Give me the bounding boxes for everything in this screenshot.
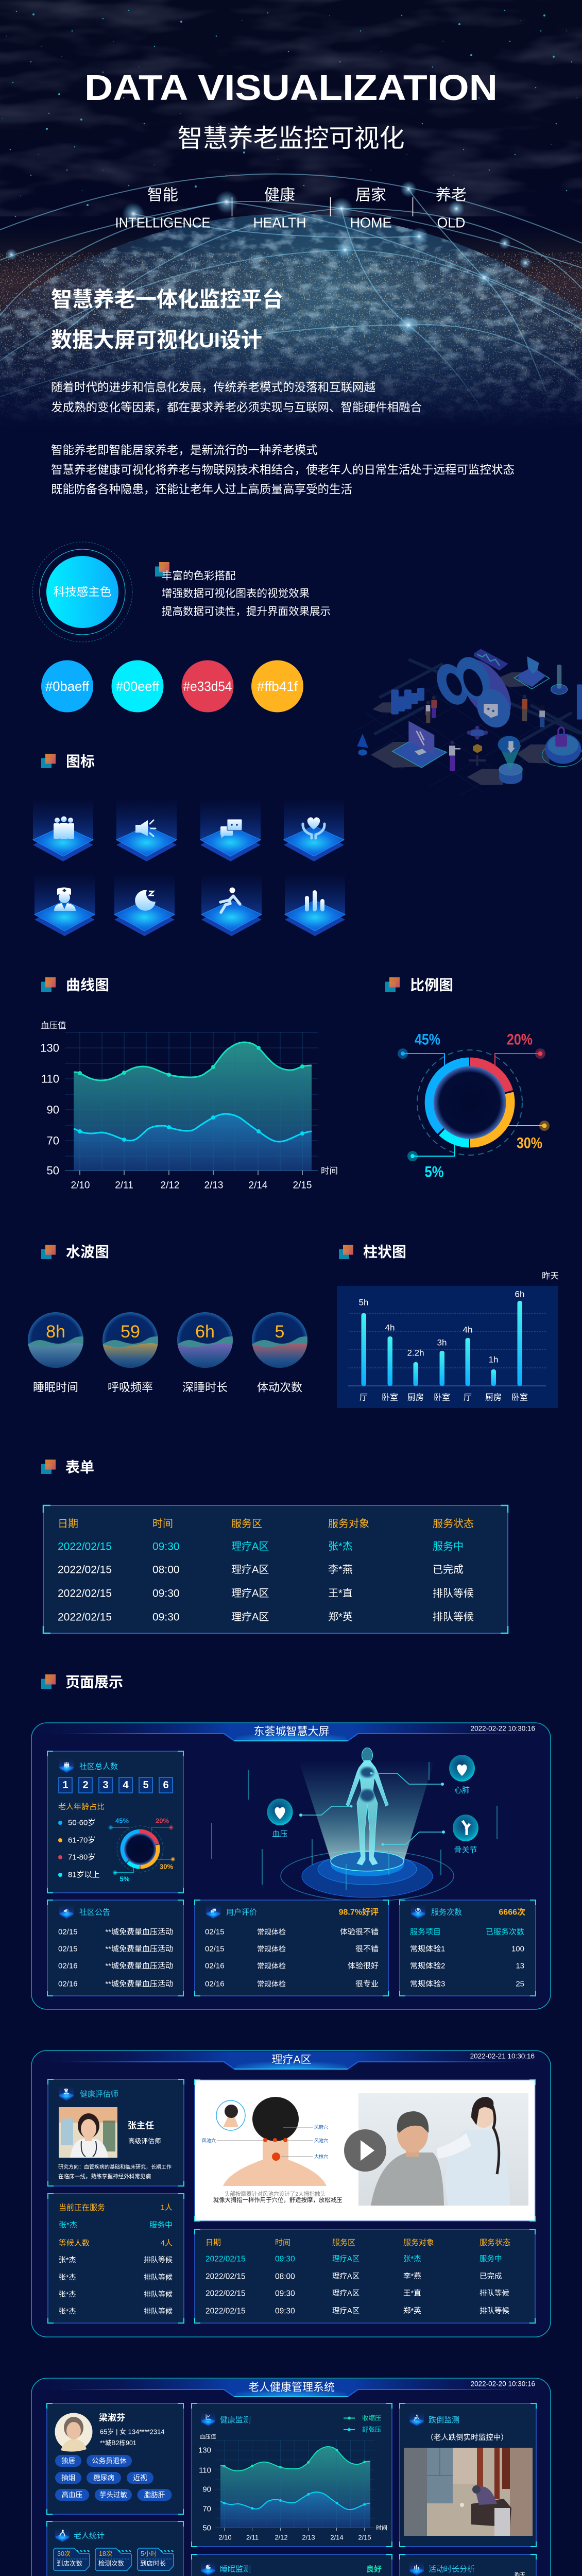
hero background: starry sky and city [0, 0, 582, 421]
panel: elder statistics: 检测次数 [98, 2560, 125, 2567]
heading: line chart: 曲线图 [66, 977, 109, 993]
heading: bar chart [339, 1244, 406, 1260]
panel: queue status: 服务中 [149, 2221, 173, 2230]
panel: elder statistics: 30次 [57, 2550, 71, 2557]
illustration: isometric smart network [354, 649, 582, 795]
panel: user reviews: 很不错 [355, 1944, 379, 1954]
panel: elder statistics: 到店时长 [140, 2560, 166, 2567]
panel: community population: 5 [143, 1780, 149, 1791]
keyword row: 健康 [264, 187, 295, 204]
panel: fall monitoring: （老人跌倒实时监控中） [426, 2433, 508, 2442]
table panel: 2022/02/15 [58, 1564, 112, 1575]
callout: bones and joints [453, 1815, 478, 1855]
panel: health monitoring: 110 [199, 2466, 211, 2475]
water charts: 深睡时长 [182, 1381, 228, 1394]
panel: user reviews: 用户评价 [226, 1908, 257, 1917]
table panel: 09:30 [152, 1588, 180, 1599]
heading: icons: 图标 [66, 753, 95, 770]
panel: service count: 常规体验3 [410, 1979, 445, 1989]
panel: community population: 81岁以上 [68, 1870, 100, 1879]
table panel: 09:30 [152, 1540, 180, 1553]
panel: service count: 常规体验1 [410, 1944, 445, 1954]
panel: community population: 45% [115, 1817, 129, 1825]
panel: service table: 理疗A区 [332, 2255, 360, 2263]
heading: proportion chart: 比例图 [410, 977, 453, 993]
panel: queue status: 张*杰 [59, 2290, 76, 2298]
panel: community notices: 02/16 [58, 1962, 78, 1970]
panel: elder statistics [47, 2521, 183, 2576]
heading: platform: 数据大屏可视化UI设计 [51, 328, 262, 352]
panel: community notices: 02/15 [58, 1944, 78, 1954]
icon: nurse [35, 873, 95, 936]
panel: user reviews: 98.7%好评 [339, 1907, 379, 1917]
panel: community population: 2 [82, 1780, 89, 1791]
illustration: neck acupoints [202, 2097, 342, 2204]
table panel: 2022/02/15 [58, 1588, 112, 1599]
heading: water chart: 水波图 [66, 1244, 109, 1260]
callout: heart and lungs: 心肺 [454, 1786, 470, 1795]
water charts: 8h [46, 1322, 65, 1342]
line chart: blood pressure: 70 [47, 1134, 59, 1147]
table panel: 理疗A区 [231, 1564, 269, 1575]
panel: community population: 社区总人数 [79, 1762, 118, 1771]
panel: community notices: **城免费量血压活动 [105, 1944, 173, 1954]
icon set [33, 799, 345, 936]
photo: elder avatar [55, 2413, 93, 2452]
donut chart: 20% [507, 1031, 533, 1048]
line chart: blood pressure: 2/14 [249, 1180, 268, 1191]
panel: queue status: 张*杰 [59, 2221, 77, 2230]
heading: table [41, 1459, 94, 1476]
panel: service table: 2022/02/15 [206, 2290, 246, 2298]
panel: health monitoring: 70 [202, 2505, 211, 2513]
panel: health monitoring: 血压值 [200, 2433, 216, 2440]
bar chart: activity: 厨房 [485, 1393, 502, 1402]
illustration: neck acupoints: 头部按摩器针对风池穴设计了2大拇指触头 [225, 2191, 326, 2197]
illustration: neck acupoints: 就像大拇指一样作用于穴位，舒适按摩，放松减压 [213, 2196, 342, 2204]
panel: elder profile: 梁淑芬 [99, 2413, 125, 2422]
screen 3: elderly health management [31, 2378, 551, 2576]
heading: water chart [41, 1244, 109, 1260]
panel: community population: 50-60岁 [68, 1819, 95, 1827]
table panel: 服务中 [433, 1540, 464, 1552]
illustration: neck acupoints: 风池穴 [314, 2138, 328, 2143]
table panel [43, 1505, 508, 1633]
panel: elder profile: 65岁 | 女 134****2314 [100, 2428, 165, 2436]
panel: community population: 71-80岁 [68, 1853, 95, 1862]
bar chart: activity: 卧室 [382, 1393, 398, 1402]
panel: health assessor: 张主任 [128, 2121, 154, 2131]
water charts: 体动次数 [257, 1381, 302, 1394]
panel: service table: 已完成 [480, 2272, 502, 2281]
panel: user reviews: 体验很好 [348, 1962, 379, 1970]
table panel: 服务状态 [433, 1518, 474, 1530]
subtitle: 智慧养老监控可视化 [177, 125, 405, 152]
screen 2: therapy zone: 理疗A区 [271, 2054, 312, 2066]
panel: community population: 1 [62, 1780, 69, 1791]
panel: community population: 3 [102, 1780, 109, 1791]
heading: line chart [41, 977, 109, 993]
table panel: 日期 [58, 1518, 78, 1530]
panel: service table: 2022/02/15 [206, 2255, 246, 2264]
photo: doctor treats patient [358, 2093, 528, 2206]
intro paragraph [51, 381, 515, 496]
water charts: 5 [275, 1322, 284, 1342]
callout: blood pressure: 血压 [272, 1830, 288, 1838]
panel: community population: 4 [123, 1780, 129, 1791]
panel: sleep monitoring [192, 2554, 392, 2576]
illustration: neck acupoints: 大椎穴 [314, 2154, 328, 2159]
main colour disc [32, 542, 132, 642]
bar chart: activity: 昨天 [542, 1271, 559, 1281]
title: DATA VISUALIZATION [84, 67, 498, 108]
panel: health monitoring: 2/13 [302, 2534, 315, 2541]
panel: elder profile: 糖尿病 [93, 2474, 114, 2482]
bar chart: activity: 4h [385, 1323, 395, 1332]
panel: community population: 61-70岁 [68, 1836, 95, 1844]
panel: service table: 张*杰 [403, 2255, 421, 2263]
bar chart: activity: 1h [489, 1355, 498, 1364]
panel: service table: 理疗A区 [332, 2272, 360, 2281]
panel: service table: 服务中 [480, 2255, 502, 2263]
heading: platform: 智慧养老一体化监控平台 [51, 287, 283, 311]
bar chart: activity: 厨房 [407, 1393, 424, 1402]
bar chart: activity: 4h [463, 1325, 472, 1334]
panel: health monitoring: 舒张压 [362, 2426, 382, 2433]
panel: elder statistics: 老人统计 [74, 2532, 105, 2540]
colour description: 丰富的色彩搭配 [162, 570, 236, 582]
panel: community population: 6 [163, 1780, 169, 1791]
photo: fall camera [404, 2448, 533, 2536]
panel: health monitoring: 90 [202, 2485, 211, 2494]
panel: community notices: **城免费量血压活动 [105, 1979, 173, 1989]
panel: community population [47, 1751, 183, 1893]
panel: service count: 已服务次数 [486, 1928, 524, 1936]
icon: people [33, 799, 93, 861]
screen 1: community dashboard [31, 1723, 551, 2009]
line chart: blood pressure: 90 [47, 1104, 59, 1116]
table panel: 理疗A区 [231, 1611, 269, 1623]
panel: service table: 09:30 [275, 2307, 295, 2315]
colour swatches: #00eeff [116, 679, 160, 694]
water charts: 59 [121, 1322, 140, 1342]
heading: platform [51, 287, 283, 352]
heading: proportion chart [385, 977, 453, 993]
panel: health monitoring: 2/11 [246, 2534, 259, 2541]
panel: health monitoring: 2/10 [218, 2534, 232, 2541]
panel: elder profile [47, 2403, 183, 2514]
photo: doctor [59, 2107, 117, 2158]
keyword row: OLD [437, 214, 466, 231]
panel: community notices: **城免费量血压活动 [105, 1962, 173, 1970]
panel: user reviews: 常规体检 [257, 1928, 286, 1936]
keyword row: 智能 [147, 187, 178, 204]
screen 3: elderly health management: 2022-02-20 10:30:16 [471, 2380, 535, 2387]
table panel: 理疗A区 [231, 1587, 269, 1599]
panel: elder profile: 脂肪肝 [144, 2491, 165, 2499]
heading: bar chart: 柱状图 [363, 1244, 406, 1260]
panel: service table: 2022/02/15 [206, 2272, 246, 2281]
panel: health assessor: 健康评估师 [80, 2090, 118, 2099]
panel: health monitoring: 2/15 [358, 2534, 371, 2541]
panel: service count: 常规体验2 [410, 1962, 445, 1970]
donut chart [398, 1031, 550, 1181]
panel: sleep monitoring: 睡眠监测 [220, 2565, 251, 2574]
panel: user reviews: 很专业 [355, 1979, 379, 1989]
panel: user reviews: 常规体检 [257, 1945, 286, 1953]
panel: queue status: 张*杰 [59, 2256, 76, 2264]
icon: caring heart [284, 799, 344, 861]
panel: user reviews: 02/15 [205, 1928, 225, 1936]
donut chart: 5% [424, 1163, 444, 1181]
table panel: 08:00 [152, 1564, 180, 1575]
heading: icons [41, 753, 95, 770]
bar chart: activity: 2.2h [407, 1348, 424, 1358]
panel: health monitoring: 健康监测 [220, 2416, 251, 2425]
panel: service table: 2022/02/15 [206, 2307, 246, 2315]
panel: health monitoring: 收缩压 [362, 2414, 382, 2421]
panel: community notices: 02/16 [58, 1979, 78, 1989]
panel: health monitoring: 2/14 [330, 2534, 344, 2541]
panel: health assessor: 在临床一线，熟练掌握神经外科常见病 [58, 2173, 151, 2180]
water charts: 呼吸频率 [108, 1381, 153, 1394]
bar chart: activity: 卧室 [434, 1393, 450, 1402]
panel: service table: 郑*英 [403, 2306, 421, 2315]
panel: service table: 时间 [275, 2238, 290, 2247]
panel: community population: 30% [160, 1863, 173, 1870]
intro paragraph: 智慧养老健康可视化将养老与物联网技术相结合，使老年人的日常生活处于远程可监控状态 [51, 464, 515, 476]
line chart: blood pressure: 2/13 [204, 1180, 223, 1191]
panel: user reviews: 常规体检 [257, 1980, 286, 1988]
intro paragraph: 发成熟的变化等因素，都在要求养老必须实现与互联网、智能硬件相融合 [51, 401, 422, 414]
keyword row: 养老 [436, 187, 467, 204]
colour swatches: #0baeff [45, 679, 90, 694]
panel: queue status: 排队等候 [144, 2290, 173, 2298]
panel: user reviews: 02/15 [205, 1944, 225, 1954]
panel: massage video [195, 2080, 535, 2221]
panel: fall monitoring: 跌倒监测 [429, 2416, 459, 2425]
panel: service table: 理疗A区 [332, 2307, 360, 2315]
panel: queue status: 排队等候 [144, 2307, 173, 2315]
line chart: blood pressure: 2/12 [161, 1180, 179, 1191]
intro paragraph: 智能养老即智能居家养老，是新流行的一种养老模式 [51, 444, 318, 456]
panel: queue status: 当前正在服务 [59, 2203, 105, 2212]
screen 1: community dashboard: 2022-02-22 10:30:16 [471, 1725, 535, 1732]
icon: sleep moon [114, 873, 175, 936]
callout: heart and lungs [449, 1755, 475, 1795]
panel: elder statistics: 到店次数 [57, 2560, 83, 2567]
callout: blood pressure [267, 1799, 293, 1838]
panel: service count: 100 [511, 1944, 524, 1954]
bar chart: activity [337, 1271, 559, 1408]
panel: elder profile: 独居 [61, 2457, 75, 2465]
panel: elder profile: 高血压 [62, 2490, 82, 2499]
panel: sleep monitoring: 良好 [366, 2565, 382, 2574]
panel: queue status: 1人 [161, 2203, 173, 2212]
main colour disc: 科技感主色 [54, 585, 111, 599]
panel: health assessor [48, 2079, 184, 2186]
panel: service table: 日期 [206, 2238, 221, 2247]
panel: user reviews: 02/16 [205, 1979, 225, 1989]
panel: service count: 13 [516, 1962, 524, 1970]
panel: service table: 09:30 [275, 2255, 295, 2264]
screen 2: therapy zone [31, 2050, 551, 2337]
panel: elder profile: 公务员退休 [92, 2457, 127, 2465]
panel: service table: 李*燕 [403, 2272, 421, 2281]
colour swatches: #ffb41f [257, 679, 298, 694]
panel: elder statistics: 5小时 [141, 2550, 157, 2557]
water charts: 6h [195, 1322, 215, 1342]
keyword row: HOME [350, 214, 391, 231]
bar chart: activity: 6h [515, 1289, 524, 1299]
table panel: 排队等候 [433, 1587, 474, 1599]
panel: activity duration: 活动时长分析 [429, 2565, 475, 2574]
panel: service count: 服务项目 [410, 1928, 441, 1936]
table panel: 时间 [152, 1518, 173, 1530]
illustration: neck acupoints: 风府穴 [314, 2124, 328, 2130]
table panel: 郑*英 [328, 1611, 353, 1623]
icon: speaker [116, 799, 177, 861]
panel: health monitoring: 2/12 [275, 2534, 288, 2541]
panel: activity duration [400, 2554, 536, 2576]
table panel: 李*燕 [328, 1564, 353, 1575]
panel: health monitoring [192, 2403, 392, 2547]
heading: page showcase: 页面展示 [65, 1674, 123, 1690]
panel: community population: 5% [120, 1875, 130, 1883]
panel: health monitoring: 130 [198, 2446, 211, 2454]
panel: service table: 08:00 [275, 2272, 295, 2281]
illustration: neck acupoints: 风池穴 [202, 2138, 216, 2143]
panel: user reviews: 常规体检 [257, 1962, 286, 1970]
panel: service count: 25 [516, 1979, 524, 1989]
screen 3: elderly health management: 老人健康管理系统 [248, 2381, 335, 2394]
colour description: 提高数据可读性，提升界面效果展示 [162, 606, 331, 617]
table panel: 已完成 [433, 1564, 464, 1575]
icon: play button [344, 2129, 386, 2172]
panel: service table: 排队等候 [480, 2289, 509, 2298]
intro paragraph: 随着时代的进步和信息化发展，传统养老模式的没落和互联网越 [51, 381, 375, 394]
panel: queue status [48, 2194, 184, 2323]
panel: user reviews [195, 1900, 388, 1996]
panel: health monitoring: 时间 [376, 2524, 387, 2531]
panel: queue status: 等候人数 [59, 2238, 90, 2247]
panel: service table: 服务状态 [480, 2238, 510, 2247]
panel: service count [400, 1900, 536, 1996]
panel: service count: 服务次数 [431, 1908, 462, 1917]
keyword row [115, 187, 467, 231]
panel: health assessor: 研究方向：血管疾病的基础和临床研究，长期工作 [58, 2164, 172, 2170]
table panel: 服务对象 [328, 1518, 369, 1530]
panel: service table: 09:30 [275, 2290, 295, 2298]
line chart: blood pressure: 血压值 [41, 1021, 66, 1030]
colour description [155, 562, 331, 617]
panel: elder statistics: 18次 [99, 2550, 112, 2557]
donut chart: 30% [517, 1134, 542, 1152]
panel: community population: 老人年龄占比 [58, 1802, 105, 1811]
panel: queue status: 张*杰 [59, 2273, 76, 2281]
table panel: 2022/02/15 [58, 1612, 112, 1623]
panel: service table: 服务对象 [403, 2238, 434, 2247]
bar chart: activity: 厅 [464, 1393, 472, 1402]
panel: service table: 服务区 [332, 2238, 355, 2247]
colour description: 增强数据可视化图表的视觉效果 [162, 587, 310, 600]
panel: elder profile: 抽烟 [61, 2474, 75, 2482]
screen 1: community dashboard: 东荟城智慧大屏 [253, 1726, 330, 1737]
table panel: 排队等候 [433, 1611, 474, 1623]
keyword row: HEALTH [253, 214, 306, 231]
panel: elder profile: 芋头过敏 [99, 2491, 127, 2499]
panel: community notices: **城免费量血压活动 [105, 1928, 173, 1936]
table panel: 09:30 [152, 1612, 180, 1623]
donut chart: 45% [415, 1031, 440, 1048]
line chart: blood pressure: 2/10 [71, 1180, 90, 1191]
panel: service table: 排队等候 [480, 2306, 509, 2315]
screen 2: therapy zone: 2022-02-21 10:30:16 [470, 2053, 535, 2060]
panel: fall monitoring [400, 2403, 536, 2547]
panel: service table [195, 2229, 535, 2323]
bar chart: activity: 厅 [360, 1393, 368, 1402]
line chart: blood pressure: 110 [41, 1073, 59, 1085]
panel: queue status: 排队等候 [144, 2273, 173, 2281]
line chart: blood pressure: 50 [47, 1164, 59, 1177]
bar chart: activity: 卧室 [511, 1393, 528, 1402]
panel: community notices [47, 1900, 183, 1996]
bar chart: activity: 5h [359, 1297, 368, 1308]
panel: queue status: 排队等候 [144, 2256, 173, 2264]
panel: community notices: 02/15 [58, 1928, 78, 1936]
bar chart: activity: 3h [437, 1337, 447, 1348]
panel: community population: 20% [156, 1817, 169, 1825]
panel: user reviews: 体验很不错 [340, 1928, 379, 1936]
panel: service table: 理疗A区 [332, 2289, 360, 2298]
line chart: blood pressure: 130 [40, 1042, 59, 1054]
table panel: 张*杰 [328, 1540, 353, 1552]
intro paragraph: 既能防备各种隐患，还能让老年人过上高质量高享受的生活 [51, 483, 352, 496]
panel: user reviews: 02/16 [205, 1962, 225, 1970]
callout: bones and joints: 骨关节 [454, 1845, 477, 1855]
table panel: 服务区 [231, 1518, 262, 1530]
colour swatches: #e33d54 [183, 679, 232, 694]
panel: community notices: 社区公告 [79, 1908, 110, 1917]
line chart: blood pressure: 2/11 [115, 1180, 133, 1191]
keyword row: INTELLIGENCE [115, 214, 210, 231]
line chart: blood pressure: 2/15 [293, 1180, 312, 1191]
panel: queue status: 4人 [161, 2239, 173, 2247]
line chart: blood pressure: 时间 [321, 1166, 338, 1176]
icon: bars [285, 873, 345, 936]
icon: fall [201, 873, 262, 936]
colour swatches [41, 660, 303, 712]
panel: service count: 6666次 [499, 1907, 525, 1917]
table panel: 王*直 [328, 1587, 353, 1599]
line chart: blood pressure [40, 1021, 338, 1191]
heading: table: 表单 [65, 1459, 94, 1476]
panel: health assessor: 高级评估师 [128, 2137, 161, 2145]
hologram: human body on platform [212, 1748, 497, 1901]
keyword row: 居家 [355, 187, 386, 204]
panel: elder profile: **城B2栋901 [100, 2439, 136, 2447]
panel: health monitoring: 50 [202, 2523, 211, 2533]
icon: chat [200, 799, 261, 861]
panel: elder profile: 近视 [133, 2474, 147, 2482]
panel: queue status: 张*杰 [59, 2307, 76, 2315]
panel: service table: 王*直 [403, 2289, 421, 2298]
water charts [27, 1312, 308, 1394]
table panel: 2022/02/15 [58, 1540, 112, 1553]
table panel: 理疗A区 [231, 1540, 269, 1552]
water charts: 睡眠时间 [33, 1381, 78, 1394]
